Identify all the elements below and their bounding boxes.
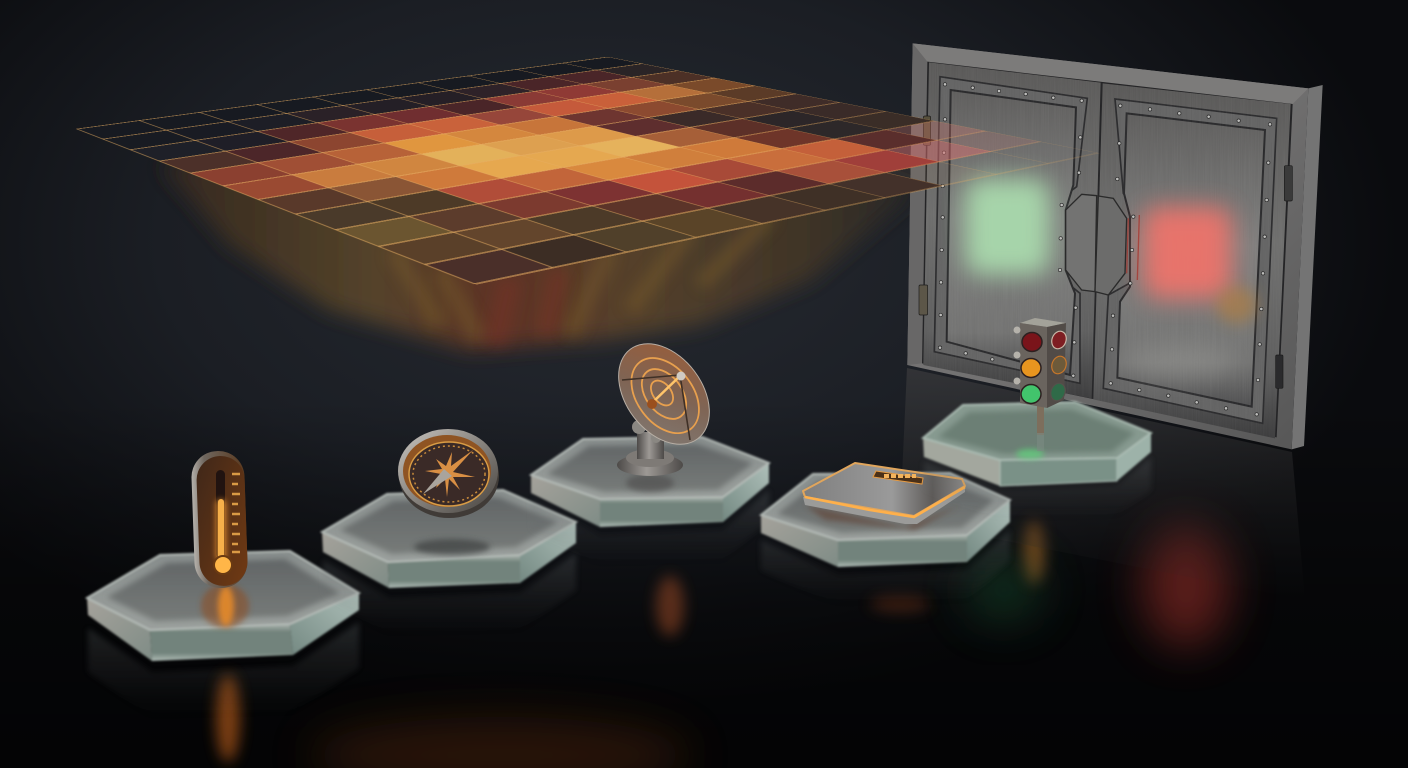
plate: scale base bbox=[761, 473, 1010, 605]
left door bbox=[923, 62, 1101, 398]
plate: compass base bbox=[322, 490, 576, 635]
brushed metal texture bbox=[923, 62, 1291, 438]
icon: compass bbox=[398, 429, 499, 518]
door assembly bbox=[907, 43, 1323, 449]
heat grid under-glow bbox=[160, 100, 920, 350]
icon: weighing scale bbox=[803, 463, 965, 524]
plate: radar dish base bbox=[531, 437, 769, 565]
icon: thermometer bbox=[191, 450, 248, 589]
floor reflections of light bbox=[216, 520, 1230, 768]
right door bbox=[1093, 83, 1291, 438]
door coloured lights bbox=[965, 178, 1257, 382]
rivets bbox=[938, 83, 1272, 416]
plate: thermometer base bbox=[87, 551, 359, 718]
door frame bbox=[907, 43, 1323, 449]
heatmap grid bbox=[76, 57, 1100, 284]
plate: traffic light base bbox=[923, 402, 1151, 520]
grid lines bbox=[77, 57, 1098, 284]
door floor reflection bbox=[900, 368, 1305, 600]
icon: traffic light bbox=[1014, 318, 1069, 451]
heat cells bbox=[77, 57, 1098, 284]
centre lock octagon bbox=[1066, 194, 1139, 295]
hinges bbox=[919, 116, 1292, 388]
icon: radar dish bbox=[600, 326, 728, 492]
